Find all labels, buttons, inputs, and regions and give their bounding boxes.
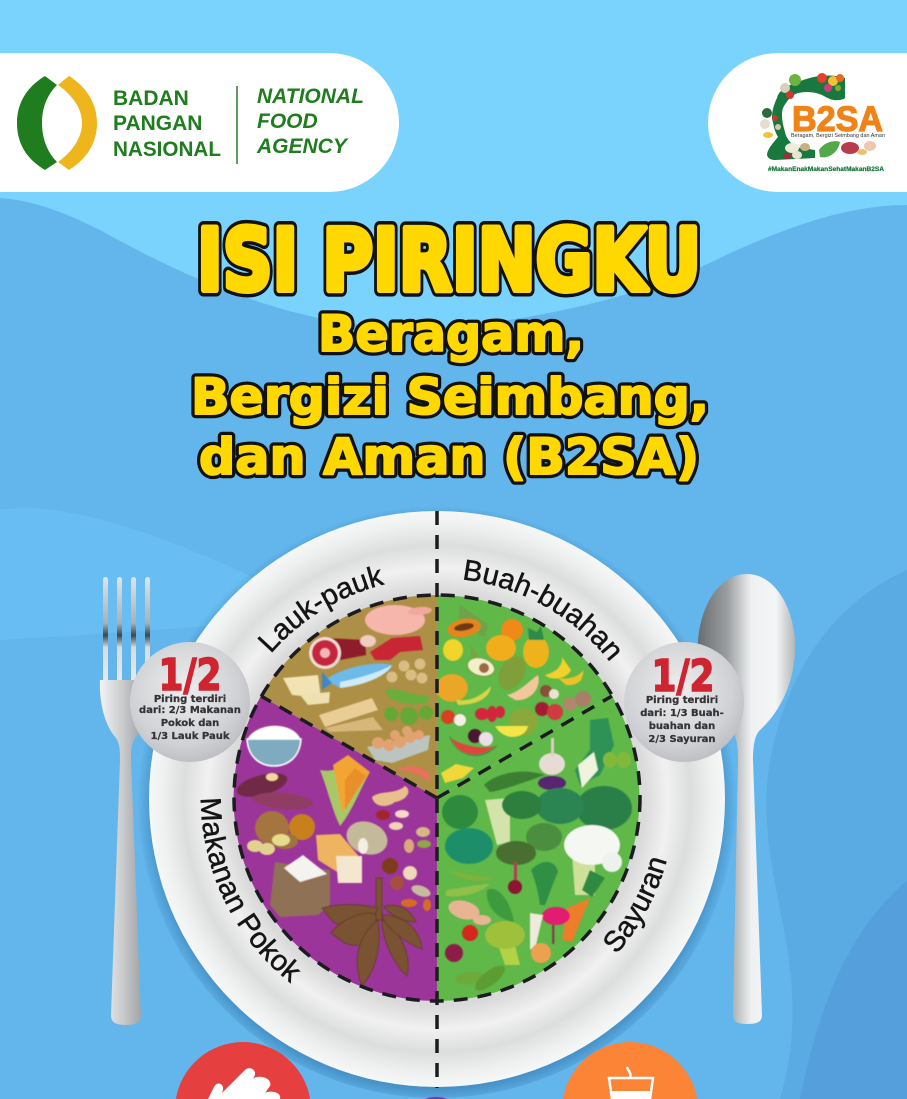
text: B2SA: B2SA (792, 100, 883, 139)
callout: left 1/2: Pokok dan (161, 718, 219, 729)
food: bok choy (575, 718, 614, 788)
food: beans (376, 810, 431, 853)
food: watermelon (449, 736, 498, 756)
text: National Food Agency: AGENCY (256, 135, 349, 158)
food: salak and sapodilla (540, 685, 591, 711)
icon: green and yellow crescents (17, 76, 97, 170)
header panel: Badan Pangan Nasional logo (0, 53, 399, 192)
food: starfruit slice (436, 674, 468, 702)
food: bananas (545, 657, 583, 685)
panel: plate (141, 510, 733, 1098)
food: shrimp (397, 766, 430, 782)
food: herbs (502, 791, 542, 819)
heading outline: Beragam: Beragam, (318, 305, 584, 363)
heading outline: dan Aman (B2SA): dan Aman (B2SA) (199, 428, 699, 486)
food: rice bowl (247, 726, 301, 766)
header panel: B2SA logo (708, 53, 907, 192)
icon: purple circle (424, 1097, 448, 1099)
food: beet leaves (496, 841, 536, 865)
food: papaya (446, 605, 488, 640)
food: soursop (493, 651, 531, 695)
food: eggplant (538, 776, 566, 790)
food: tempeh (319, 698, 383, 732)
food: edamame (385, 689, 429, 704)
food: peanut (372, 786, 408, 806)
food: avocado (465, 645, 497, 679)
food: cauliflower (564, 825, 622, 895)
food: cabbage (576, 786, 632, 830)
quadrant: buah-buahan green (437, 595, 612, 798)
icon: green C shape (767, 75, 845, 160)
text: National Food Agency: FOOD (257, 110, 318, 133)
foods: buah-buahan (436, 605, 591, 783)
quadrant: makanan pokok purple (234, 696, 437, 1001)
food: leaf (487, 889, 514, 922)
icon: spoon (698, 574, 795, 1024)
food: orange root (531, 943, 551, 963)
text: National Food Agency: NATIONAL (257, 85, 364, 108)
food: tomato (462, 925, 478, 941)
callout: right 1/2: dari: 1/3 Buah- (640, 708, 724, 719)
text: hashtag: #MakanEnakMakanSehatMakanB2SA (768, 166, 885, 173)
food: daikon (530, 913, 543, 950)
label: Makanan Pokok: Makanan Pokok (200, 799, 301, 984)
heading: Beragam: Beragam, (318, 305, 584, 363)
foods: sayuran (442, 718, 632, 995)
food: spinach (445, 828, 493, 864)
food: flour sack (270, 855, 330, 917)
food: amaranth (526, 823, 562, 851)
heading: dan Aman (B2SA): dan Aman (B2SA) (199, 428, 699, 486)
food: orange (501, 619, 523, 641)
food: corn (320, 755, 370, 826)
food: chicken (365, 605, 432, 635)
food: sweet potatoes (234, 769, 314, 812)
food: potatoes (247, 811, 315, 855)
food: broccoli (485, 921, 525, 965)
food: kale (536, 788, 584, 824)
food: mangosteen (468, 729, 493, 746)
label: Buah-buahan: Buah-buahan (464, 560, 620, 662)
callout: right 1/2: Piring terdiri (646, 695, 718, 706)
foods: makanan pokok (234, 726, 432, 986)
heading outline: Isi Piringku: ISI PIRINGKU (197, 211, 701, 311)
heading: Bergizi Seimbang: Bergizi Seimbang, (191, 368, 709, 426)
dashed plate dividers (234, 511, 640, 1088)
food: pineapple (523, 626, 549, 668)
text: logo subtitle: Beragam, Bergizi Seimbang dan Aman (791, 133, 885, 139)
icon: red circle with hand (176, 1042, 310, 1099)
food: yellow starfruit (441, 764, 474, 783)
callout: left 1/2: 1/2 (158, 650, 222, 701)
food: broccoli top (442, 795, 478, 829)
icon: orange circle with glass (563, 1042, 697, 1099)
foods: lauk-pauk (283, 605, 433, 782)
food: pumpkin (486, 635, 516, 661)
food: cucumbers (454, 961, 508, 995)
food: nuts (382, 858, 432, 911)
food: beet small (508, 862, 522, 894)
food: herb top (531, 862, 558, 905)
food: green peppers (603, 752, 631, 768)
food: garlic (539, 738, 565, 775)
food: fish (322, 663, 392, 690)
label: Lauk-pauk: Lauk-pauk (257, 566, 386, 652)
food: carrot (562, 870, 605, 942)
food: eggs in tray (367, 726, 430, 763)
food: tofu (283, 675, 330, 705)
callout: right 1/2: 2/3 Sayuran (648, 734, 716, 745)
callout: right 1/2 (624, 642, 744, 762)
quadrant: lauk-pauk brown (261, 595, 437, 798)
food: rambutan (441, 710, 466, 726)
food: bread (316, 834, 362, 883)
title (191, 211, 709, 486)
callout: left 1/2 (130, 642, 250, 762)
food: cassava leaves (322, 878, 422, 986)
callout: left 1/2: dari: 2/3 Makanan (139, 705, 241, 716)
quadrant: sayuran green (437, 696, 639, 1001)
food: pink beet (542, 907, 570, 944)
food: durian (495, 708, 538, 737)
food: long beans (484, 772, 545, 792)
food: soybeans (386, 658, 428, 684)
callout: left 1/2: Piring terdiri (154, 694, 226, 705)
label: Sayuran: Sayuran (604, 858, 667, 952)
food: banana (456, 686, 491, 705)
food: taro (342, 816, 392, 860)
food: mango (443, 639, 463, 661)
food: green beans (448, 870, 494, 881)
food: pomegranate (535, 702, 563, 720)
icon: food on B2SA logo (760, 73, 876, 159)
food: potato (446, 897, 491, 925)
food: celery (485, 798, 510, 845)
food: meat leg (309, 635, 376, 669)
callout: left 1/2: 1/3 Lauk Pauk (150, 731, 230, 742)
food: peas (446, 884, 490, 896)
text: Badan Pangan Nasional: BADAN (113, 87, 189, 110)
callout: right 1/2: buahan dan (649, 721, 715, 732)
food: steak (370, 636, 423, 660)
heading: Isi Piringku: ISI PIRINGKU (197, 211, 701, 311)
food: melon (507, 675, 539, 700)
text: Badan Pangan Nasional: NASIONAL (113, 138, 221, 161)
heading outline: Bergizi Seimbang: Bergizi Seimbang, (191, 368, 709, 426)
callout: right 1/2: 1/2 (652, 651, 714, 702)
food: beetroot (445, 944, 463, 962)
food: red fruit (475, 706, 505, 722)
icon: fork (100, 577, 151, 1025)
text: Badan Pangan Nasional: PANGAN (113, 112, 202, 135)
food: green peas (384, 706, 433, 725)
